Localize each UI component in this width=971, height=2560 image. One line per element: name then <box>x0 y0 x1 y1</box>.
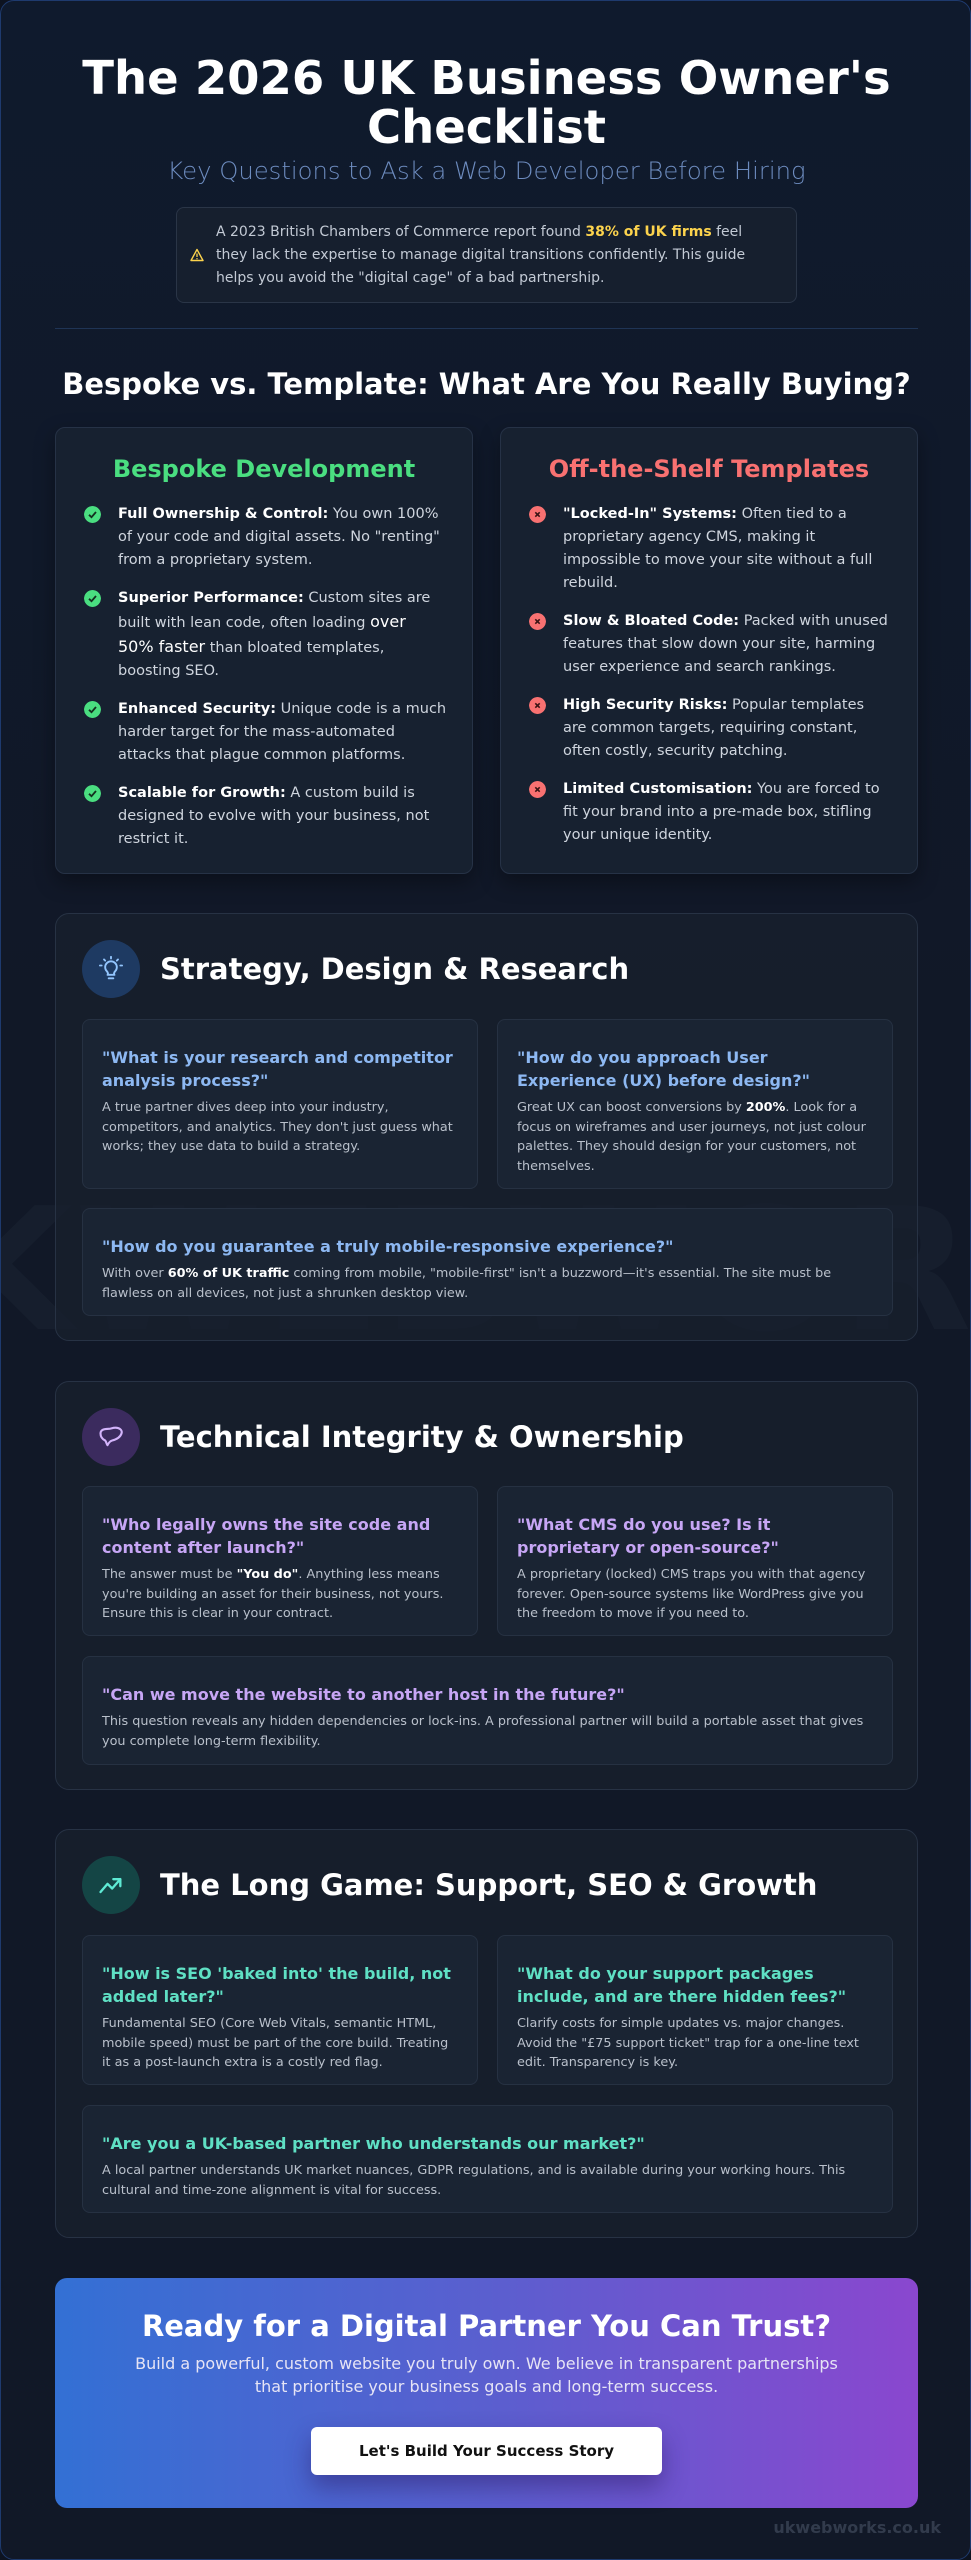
title: The 2026 UK Business Owner's <box>82 51 891 105</box>
section heading: technical <box>82 1408 684 1466</box>
CTA banner: Build a powerful, custom website you truly own. We believe in transparent partnerships that prioritise your business goals and long-term success. <box>135 2354 838 2396</box>
panel: bespoke development <box>55 427 473 874</box>
callout: statistic: A 2023 British Chambers of Commerce report found 38% of UK firms feel <box>216 224 742 240</box>
panel: bespoke development: 50% faster than bloated templates, <box>118 637 384 656</box>
question: UX: Great UX can boost conversions by 200%. Look for a focus on wireframes and user journeys, not just colour palettes. They should design for your customers, not themselves. <box>517 1100 866 1174</box>
panel: off-the-shelf templates: your unique identity. <box>563 827 712 843</box>
question: UX <box>497 1019 893 1189</box>
question: ownership: "Who legally owns the site code and content after launch?" <box>102 1515 430 1557</box>
panel: bespoke development: Scalable for Growth: A custom build is <box>118 785 415 801</box>
question: CMS: A proprietary (locked) CMS traps you with that agency forever. Open-source systems like WordPress give you the freedom to move if you need to. <box>517 1567 865 1621</box>
panel: off-the-shelf templates: Limited Customisation: You are forced to <box>563 781 880 797</box>
question: hosting <box>82 1656 893 1765</box>
question: support <box>497 1935 893 2085</box>
panel: off-the-shelf templates: rebuild. <box>563 575 618 591</box>
question: ownership <box>82 1486 478 1636</box>
panel: off-the-shelf templates: features that slow down your site, harming <box>563 636 875 652</box>
panel: the long game <box>55 1829 918 2238</box>
question: support: Clarify costs for simple updates vs. major changes. Avoid the "£75 support ticket" trap for a one-line text edit. Transparency is key. <box>517 2016 859 2070</box>
section heading: strategy <box>82 940 629 998</box>
panel: bespoke development: boosting SEO. <box>118 663 219 679</box>
question: mobile: With over 60% of UK traffic coming from mobile, "mobile-first" isn't a buzzword—it's essential. The site must be flawless on all devices, not just a shrunken desktop view. <box>102 1266 831 1300</box>
panel: off-the-shelf templates: user experience and search rankings. <box>563 659 836 675</box>
question: hosting: This question reveals any hidden dependencies or lock-ins. A professional partner will build a portable asset that gives you complete long-term flexibility. <box>102 1714 863 1748</box>
heading: bespoke vs template: Bespoke vs. Template: What Are You Really Buying? <box>62 367 911 401</box>
panel: bespoke development: of your code and digital assets. No "renting" <box>118 529 440 545</box>
panel: off-the-shelf templates <box>500 427 918 874</box>
question: CMS: "What CMS do you use? Is it proprietary or open-source?" <box>517 1515 779 1557</box>
panel: technical integrity & ownership <box>55 1381 918 1790</box>
panel: bespoke development: Full Ownership & Control: You own 100% <box>118 506 439 522</box>
question: UK partner: A local partner understands UK market nuances, GDPR regulations, and is available during your working hours. This cultural and time-zone alignment is vital for success. <box>102 2163 845 2198</box>
panel: bespoke development: Bespoke Development <box>113 455 415 483</box>
icon: warning <box>190 248 204 262</box>
question: research: "What is your research and competitor analysis process?" <box>102 1048 453 1090</box>
question: SEO <box>82 1935 478 2085</box>
question: ownership: The answer must be "You do". Anything less means you're building an asset for their business, not yours. Ensure this is clear in your contract. <box>102 1567 443 1621</box>
question: UK partner: "Are you a UK-based partner who understands our market?" <box>102 2134 645 2153</box>
panel: off-the-shelf templates: are common targets, requiring constant, <box>563 720 857 736</box>
icon: lightbulb <box>82 940 140 998</box>
footer url: ukwebworks.co.uk <box>773 2518 941 2537</box>
CTA banner: Ready for a Digital Partner You Can Trust? <box>142 2309 831 2343</box>
subtitle: Key Questions to Ask a Web Developer Before Hiring <box>167 156 806 185</box>
panel: bespoke development: from a proprietary system. <box>118 552 312 568</box>
icon: ownership shape <box>82 1408 140 1466</box>
question: UK partner <box>82 2105 893 2213</box>
section heading: long game <box>82 1856 817 1914</box>
panel: bespoke development: Superior Performance: Custom sites are <box>118 590 430 606</box>
panel: off-the-shelf templates: Off-the-Shelf Templates <box>549 455 869 483</box>
panel: bespoke development: attacks that plague common platforms. <box>118 747 405 763</box>
question: mobile <box>82 1208 893 1316</box>
panel: strategy, design & research: Strategy, Design & Research <box>160 952 629 986</box>
panel: technical integrity & ownership: Technical Integrity & Ownership <box>160 1420 684 1454</box>
question: CMS <box>497 1486 893 1636</box>
question: SEO: Fundamental SEO (Core Web Vitals, semantic HTML, mobile speed) must be part of the core build. Treating it as a post-launch extra is a costly red flag. <box>102 2016 448 2070</box>
panel: off-the-shelf templates: impossible to move your site without a full <box>563 552 872 568</box>
panel: bespoke development: built with lean code, often loading over <box>118 612 406 631</box>
question: mobile: "How do you guarantee a truly mobile-responsive experience?" <box>102 1237 673 1256</box>
title <box>82 51 891 154</box>
button: Let's Build Your Success Story <box>359 2442 614 2460</box>
panel: off-the-shelf templates: High Security Risks: Popular templates <box>563 697 864 713</box>
panel: strategy, design & research <box>55 913 918 1341</box>
panel: off-the-shelf templates: often costly, security patching. <box>563 743 788 759</box>
panel: off-the-shelf templates: fit your brand into a pre-made box, stifling <box>563 804 872 820</box>
panel: the long game: The Long Game: Support, SEO & Growth <box>160 1868 817 1902</box>
question: SEO: "How is SEO 'baked into' the build, not added later?" <box>102 1964 451 2006</box>
question: research: A true partner dives deep into your industry, competitors, and analytics. They don't just guess what works; they use data to build a strategy. <box>102 1100 453 1154</box>
panel: off-the-shelf templates: Slow & Bloated Code: Packed with unused <box>563 613 888 629</box>
panel: bespoke development: restrict it. <box>118 831 188 847</box>
question: support: "What do your support packages include, and are there hidden fees?" <box>517 1964 846 2006</box>
button <box>311 2427 662 2475</box>
panel: bespoke development: Enhanced Security: Unique code is a much <box>118 701 446 717</box>
panel: bespoke development: harder target for the mass-automated <box>118 724 395 740</box>
panel: off-the-shelf templates: "Locked-In" Systems: Often tied to a <box>563 506 847 522</box>
panel: off-the-shelf templates: proprietary agency CMS, making it <box>563 529 815 545</box>
icon: trending up <box>82 1856 140 1914</box>
callout: statistic: they lack the expertise to manage digital transitions confidently. This guide helps you avoid the "digital cage" of a bad partnership. <box>216 247 745 286</box>
question: research <box>82 1019 478 1189</box>
title: Checklist <box>367 100 606 154</box>
question: hosting: "Can we move the website to another host in the future?" <box>102 1685 625 1704</box>
panel: bespoke development: designed to evolve with your business, not <box>118 808 429 824</box>
CTA banner <box>55 2278 918 2508</box>
question: UX: "How do you approach User <box>517 1048 768 1067</box>
callout: statistic <box>176 207 797 303</box>
question: UX: Experience (UX) before design?" <box>517 1071 810 1090</box>
